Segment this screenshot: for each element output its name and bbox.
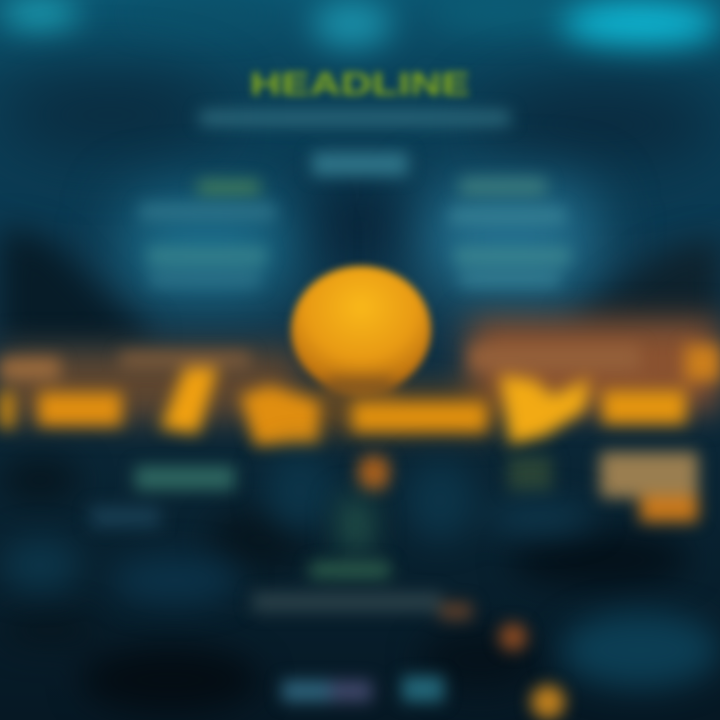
lower center text	[252, 562, 472, 620]
subtitle	[200, 111, 510, 125]
mountain: right	[570, 240, 720, 340]
right panel text	[450, 208, 570, 286]
small orange node	[358, 456, 390, 490]
left panel text	[140, 204, 275, 286]
dark gaps in the lower field	[0, 458, 690, 714]
title: HEADLINE	[250, 66, 470, 102]
top glow lights	[0, 0, 720, 48]
orange haze behind the band	[0, 320, 720, 430]
center heading	[312, 152, 408, 176]
right lower card	[508, 452, 698, 522]
bottom legend	[282, 676, 444, 702]
small orange dots	[499, 623, 565, 719]
dark cloud bands	[0, 75, 720, 265]
mountain: left	[0, 229, 150, 350]
panel: left glow	[125, 195, 290, 300]
right panel heading	[460, 178, 546, 196]
orange band	[0, 345, 720, 446]
lower teal blobs	[0, 450, 720, 688]
left panel heading	[198, 180, 260, 196]
orange sphere	[291, 266, 431, 394]
central stem	[343, 500, 369, 550]
lower left text block	[90, 466, 235, 528]
panel: right glow	[425, 185, 595, 295]
